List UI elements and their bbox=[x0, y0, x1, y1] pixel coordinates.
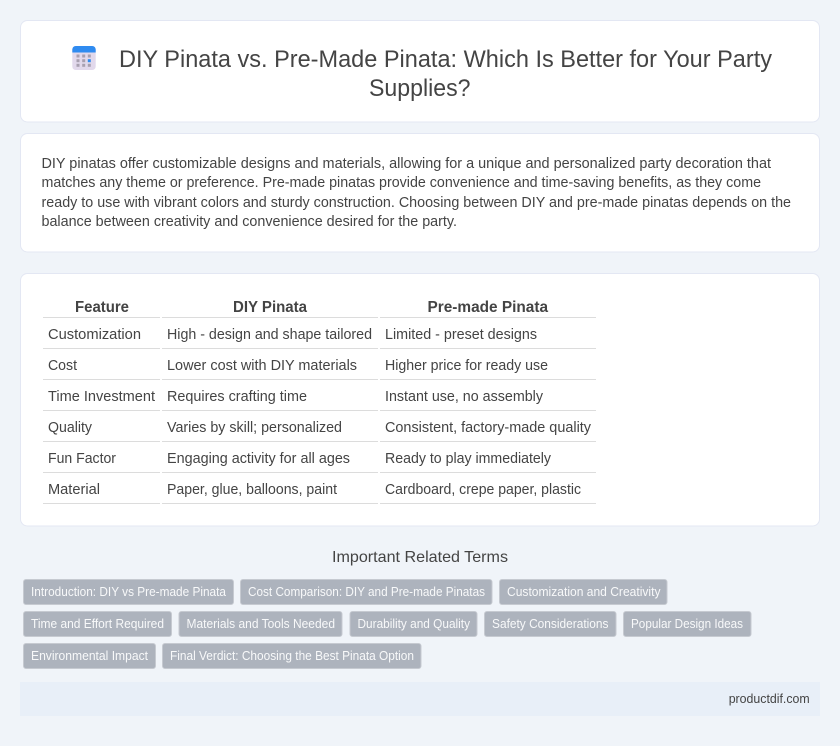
table row: customization: Customization bbox=[48, 327, 141, 343]
text block: introduction paragraph bbox=[42, 156, 791, 230]
table row: fun factor bbox=[43, 451, 596, 472]
footer bbox=[20, 682, 820, 716]
tag bbox=[24, 644, 156, 668]
tag: Introduction: DIY vs Pre-made Pinata bbox=[31, 585, 226, 599]
table row: cost: Lower cost with DIY materials bbox=[167, 358, 357, 374]
panel: comparison table bbox=[20, 274, 820, 526]
title: Supplies? bbox=[369, 75, 470, 102]
tag bbox=[484, 612, 616, 636]
table header row: Pre-made Pinata bbox=[428, 299, 548, 316]
panel: header bbox=[20, 20, 820, 122]
table row: material: Paper, glue, balloons, paint bbox=[167, 482, 337, 498]
table row: material: Cardboard, crepe paper, plastic bbox=[385, 482, 581, 498]
table row: customization: High - design and shape tailored bbox=[167, 327, 372, 343]
table row: time investment: Instant use, no assembly bbox=[385, 389, 544, 405]
tag: Time and Effort Required bbox=[31, 617, 164, 631]
table row: fun factor: Engaging activity for all ages bbox=[167, 451, 350, 467]
tag: Customization and Creativity bbox=[507, 585, 661, 599]
table row: quality bbox=[43, 420, 596, 442]
tag list: related terms bbox=[24, 580, 751, 668]
tag bbox=[179, 612, 342, 636]
tag: Final Verdict: Choosing the Best Pinata Option bbox=[170, 649, 414, 663]
table row: time investment: Requires crafting time bbox=[167, 389, 307, 405]
text block: introduction paragraph: ready to use with vibrant colors and sturdy construction. Choosing between DIY and pre-made pinatas depends on the bbox=[42, 195, 791, 211]
table row: fun factor: Fun Factor bbox=[48, 451, 116, 467]
tag bbox=[500, 580, 667, 604]
table header row bbox=[43, 299, 596, 318]
tag: Durability and Quality bbox=[358, 617, 471, 631]
text block: introduction paragraph: matches any theme or preference. Pre-made pinatas provide convenience and time-saving benefits, as they come bbox=[42, 175, 761, 191]
tag bbox=[162, 644, 421, 668]
tag: Materials and Tools Needed bbox=[186, 617, 335, 631]
table row: cost bbox=[43, 358, 596, 380]
tag bbox=[24, 580, 234, 604]
tag: Environmental Impact bbox=[31, 649, 149, 663]
table row: cost: Higher price for ready use bbox=[385, 358, 548, 374]
table row: quality: Varies by skill; personalized bbox=[167, 420, 342, 436]
tag bbox=[624, 612, 751, 636]
title: DIY Pinata vs. Pre-Made Pinata: Which Is Better for Your Party bbox=[119, 46, 773, 73]
table row: quality: Consistent, factory-made quality bbox=[385, 420, 592, 436]
heading: important related terms: Important Related Terms bbox=[332, 549, 508, 566]
tag bbox=[350, 612, 477, 636]
table row: quality: Quality bbox=[48, 420, 93, 436]
tag: Cost Comparison: DIY and Pre-made Pinatas bbox=[248, 585, 485, 599]
text block: introduction paragraph: DIY pinatas offer customizable designs and materials, allowing for a unique and personalized party decoration that bbox=[42, 156, 771, 172]
footer: productdif.com bbox=[729, 691, 810, 706]
tag bbox=[24, 612, 172, 636]
table row: time investment: Time Investment bbox=[48, 389, 155, 405]
tag: Safety Considerations bbox=[492, 617, 608, 631]
table row: cost: Cost bbox=[48, 358, 77, 374]
title bbox=[119, 46, 773, 102]
table header row: Feature bbox=[75, 299, 129, 316]
tag bbox=[240, 580, 492, 604]
table row: customization: Limited - preset designs bbox=[385, 327, 537, 343]
table row: customization bbox=[43, 327, 596, 348]
text block: introduction paragraph: balance between creativity and convenience desired for the party. bbox=[42, 214, 457, 230]
table row: material bbox=[43, 482, 596, 504]
table row: material: Material bbox=[48, 482, 100, 498]
panel: introduction text bbox=[20, 134, 820, 252]
table row: time investment bbox=[43, 389, 596, 410]
table header row: DIY Pinata bbox=[233, 299, 307, 316]
icon: calendar bbox=[72, 46, 96, 70]
tag: Popular Design Ideas bbox=[631, 617, 743, 631]
table row: fun factor: Ready to play immediately bbox=[385, 451, 552, 467]
